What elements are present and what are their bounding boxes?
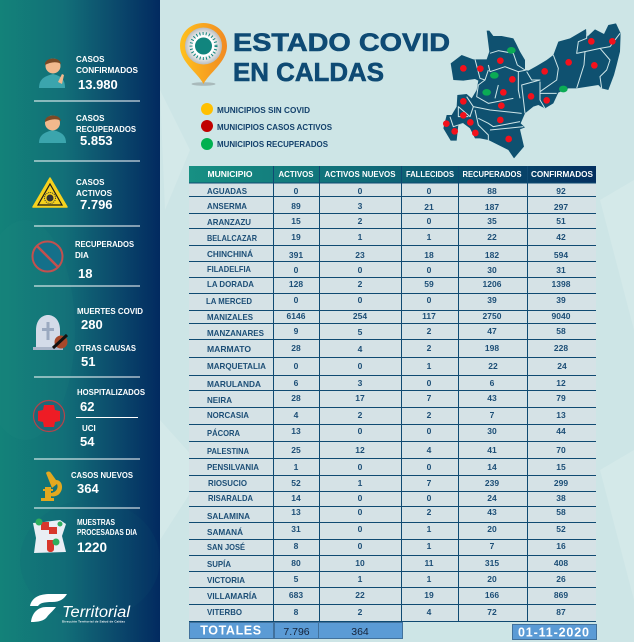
stat: hospitalizados y uci [76, 388, 146, 449]
table rows: 13 [291, 507, 301, 517]
table rows: 38 [556, 493, 566, 503]
table [189, 166, 596, 622]
table rows: RIOSUCIO [208, 478, 247, 488]
table rows: 4 [294, 410, 299, 420]
table rows: 59 [424, 279, 434, 289]
table rows: 24 [487, 493, 497, 503]
table rows: 28 [291, 393, 301, 403]
table rows: 22 [487, 232, 497, 242]
table rows: MANZANARES [207, 328, 264, 338]
logo: Territorial: Dirección Territorial de Salud de Caldas [62, 620, 125, 624]
map of Caldas [440, 20, 623, 160]
stat: hospitalizados y uci: 54 [80, 434, 95, 449]
stat: hospitalizados y uci: HOSPITALIZADOS [77, 388, 146, 397]
stat: recuperados dia: RECUPERADOS [75, 240, 135, 249]
table rows: 52 [556, 524, 566, 534]
table rows: 0 [427, 186, 432, 196]
table rows: 117 [422, 311, 436, 321]
totals row [190, 622, 402, 638]
table rows: 0 [358, 361, 363, 371]
table rows: 7 [490, 541, 495, 551]
table rows: MARMATO [207, 344, 251, 354]
table rows: 19 [291, 232, 301, 242]
table rows: 0 [294, 186, 299, 196]
table rows: 79 [556, 393, 566, 403]
table rows: 1 [358, 478, 363, 488]
table rows: 166 [485, 590, 499, 600]
icon: prohibition sign [32, 242, 62, 272]
table header: ACTIVOS NUEVOS [324, 170, 396, 179]
table rows: 6 [294, 378, 299, 388]
table rows: NORCASIA [207, 410, 249, 420]
table rows: 72 [487, 607, 497, 617]
logo: Territorial [30, 594, 131, 624]
table rows: 14 [487, 462, 497, 472]
table rows: 17 [355, 393, 365, 403]
table rows: 2 [427, 507, 432, 517]
stat: muertes covid y otras causas: OTRAS CAUSAS [75, 344, 137, 353]
table rows: 1398 [552, 279, 571, 289]
table rows: 1 [358, 232, 363, 242]
table header: FALLECIDOS [406, 170, 455, 179]
table rows: 3 [358, 201, 363, 211]
table rows: 187 [485, 202, 499, 212]
table rows: 89 [291, 201, 301, 211]
logo: Territorial: Territorial [62, 604, 131, 621]
table rows: PÁCORA [207, 428, 240, 438]
table header [189, 166, 596, 183]
table rows: 20 [487, 574, 497, 584]
table rows: 58 [556, 326, 566, 336]
table rows: 70 [556, 445, 566, 455]
faded background leaves [160, 90, 634, 600]
table rows: 0 [427, 295, 432, 305]
table rows: 683 [289, 590, 303, 600]
table rows: MARULANDA [207, 379, 261, 389]
stat: casos recuperados: CASOS [76, 114, 105, 123]
table rows: SALAMINA [207, 511, 250, 521]
table rows: 1 [427, 541, 432, 551]
table rows: 30 [487, 426, 497, 436]
table body background [189, 183, 596, 621]
legend: MUNICIPIOS RECUPERADOS [217, 139, 328, 149]
table header: CONFIRMADOS [531, 170, 594, 179]
table rows: 0 [427, 462, 432, 472]
stat: casos activos: ACTIVOS [76, 189, 113, 198]
table rows: 0 [358, 295, 363, 305]
table rows: VITERBO [207, 607, 242, 617]
table rows: FILADELFIA [207, 264, 251, 274]
table rows: 408 [554, 558, 568, 568]
table rows: 13 [291, 426, 301, 436]
table rows: 31 [556, 265, 566, 275]
table rows: 0 [358, 265, 363, 275]
table rows: 15 [291, 216, 301, 226]
table rows: 7 [427, 478, 432, 488]
stat: casos confirmados [76, 55, 139, 92]
table rows: 41 [487, 445, 497, 455]
table rows: 88 [487, 186, 497, 196]
legend [201, 103, 332, 150]
table rows: 28 [291, 343, 301, 353]
date box: 01-11-2020 [518, 626, 589, 640]
table rows: 3 [358, 378, 363, 388]
table rows: CHINCHINÁ [207, 249, 253, 259]
table rows: ANSERMA [207, 201, 247, 211]
stat: muestras procesadas dia [77, 518, 137, 555]
table rows: 0 [427, 378, 432, 388]
table rows: 92 [556, 186, 566, 196]
table rows: 7 [427, 393, 432, 403]
stat: casos confirmados: CASOS [76, 55, 105, 64]
table rows: 0 [358, 493, 363, 503]
table rows: 42 [556, 232, 566, 242]
table rows: 12 [355, 445, 365, 455]
table rows: 23 [355, 250, 365, 260]
table rows: 297 [554, 202, 568, 212]
table rows: 1 [427, 232, 432, 242]
table rows: 0 [358, 541, 363, 551]
stat: casos confirmados: CONFIRMADOS [76, 66, 139, 75]
table rows: 0 [358, 524, 363, 534]
table rows: BELALCAZAR [207, 233, 257, 243]
table rows: 9 [294, 326, 299, 336]
stat: hospitalizados y uci: 62 [80, 399, 94, 414]
stat: casos activos [76, 178, 113, 212]
stat: hospitalizados y uci: UCI [82, 424, 96, 433]
table rows: 0 [294, 295, 299, 305]
table rows: 2 [427, 343, 432, 353]
stat: muertes covid y otras causas: 51 [81, 354, 95, 369]
table rows: AGUADAS [207, 186, 247, 196]
table rows: 1 [427, 574, 432, 584]
table rows: 22 [488, 361, 498, 371]
icon: test samples [33, 518, 66, 553]
table rows: 18 [424, 250, 434, 260]
table rows: 24 [557, 361, 567, 371]
table rows: 80 [291, 558, 301, 568]
table rows: 0 [427, 216, 432, 226]
table rows: 254 [353, 311, 367, 321]
stat: recuperados dia: 18 [78, 266, 92, 281]
table rows: 16 [556, 541, 566, 551]
table rows: 7 [490, 410, 495, 420]
table rows: VILLAMARÍA [207, 591, 257, 601]
title: EN CALDAS [233, 57, 384, 87]
table rows: 47 [487, 326, 497, 336]
title: ESTADO COVID [233, 29, 450, 57]
table rows: 39 [556, 295, 566, 305]
table rows: 58 [556, 507, 566, 517]
table rows: 6 [490, 378, 495, 388]
table rows: 2 [358, 279, 363, 289]
stat: muertes covid y otras causas: MUERTES COVID [77, 307, 143, 316]
table rows: 8 [294, 541, 299, 551]
table rows: 1206 [483, 279, 502, 289]
stat: casos recuperados: 5.853 [80, 133, 113, 148]
icon: microscope [41, 472, 62, 501]
table rows: 39 [487, 295, 497, 305]
table rows [206, 186, 571, 617]
table rows: MANIZALES [207, 312, 253, 322]
table rows: ARANZAZU [207, 217, 251, 227]
stat: casos confirmados: 13.980 [78, 77, 118, 92]
title [233, 29, 450, 87]
table rows: RISARALDA [208, 493, 253, 503]
table rows: 52 [291, 478, 301, 488]
table rows: 2 [427, 410, 432, 420]
table rows: 22 [355, 590, 365, 600]
table rows: 0 [294, 361, 299, 371]
table rows: 1 [427, 361, 432, 371]
table rows: 315 [485, 558, 499, 568]
icon: biohazard warning triangle [33, 178, 67, 207]
table rows: 128 [289, 279, 303, 289]
table rows: 14 [291, 493, 301, 503]
table rows: 4 [427, 607, 432, 617]
table rows: 8 [294, 607, 299, 617]
table rows: SAN JOSÉ [207, 542, 245, 552]
icon: medical cross [34, 400, 64, 432]
stat: muestras procesadas dia: 1220 [77, 540, 107, 555]
table rows: 2 [358, 607, 363, 617]
table rows: 21 [424, 202, 434, 212]
table rows: 12 [556, 378, 566, 388]
table rows: 30 [487, 265, 497, 275]
table rows: 2 [427, 326, 432, 336]
table rows: PALESTINA [207, 446, 249, 456]
totals row: 7.796 [283, 626, 310, 638]
table rows: 198 [485, 343, 499, 353]
stat: recuperados dia: DIA [75, 251, 89, 260]
stat: casos activos: CASOS [76, 178, 105, 187]
table rows: 19 [424, 590, 434, 600]
table rows: SUPÍA [207, 559, 231, 569]
table rows: 13 [556, 410, 566, 420]
sidebar panel [0, 0, 160, 642]
table rows: 182 [485, 250, 499, 260]
totals row: TOTALES [200, 624, 262, 638]
stat: casos nuevos [71, 471, 134, 496]
stat: muertes covid y otras causas: 280 [81, 317, 103, 332]
stat: recuperados dia [75, 240, 135, 281]
stat: casos activos: 7.796 [80, 197, 113, 212]
table rows: 9040 [552, 311, 571, 321]
table rows: 0 [427, 426, 432, 436]
table rows: 43 [487, 507, 497, 517]
table rows: 20 [487, 524, 497, 534]
table rows: 51 [556, 216, 566, 226]
table rows: 10 [355, 558, 365, 568]
table rows: 1 [427, 524, 432, 534]
stat: muestras procesadas dia: PROCESADAS DIA [77, 528, 137, 537]
table rows: 25 [291, 445, 301, 455]
table rows: 869 [554, 590, 568, 600]
table rows: 44 [556, 426, 566, 436]
table rows: NEIRA [207, 395, 232, 405]
table rows: 4 [427, 445, 432, 455]
table rows: 11 [424, 558, 434, 568]
table rows: 31 [291, 524, 301, 534]
table rows: 1 [294, 462, 299, 472]
legend: MUNICIPIOS CASOS ACTIVOS [217, 122, 332, 132]
table rows: LA DORADA [207, 279, 254, 289]
stat: casos nuevos: 364 [77, 481, 99, 496]
table rows: 0 [427, 493, 432, 503]
table rows: 0 [294, 265, 299, 275]
table rows: 26 [556, 574, 566, 584]
table rows: 2 [358, 216, 363, 226]
legend: MUNICIPIOS SIN COVID [217, 105, 310, 115]
table rows: 15 [556, 462, 566, 472]
table rows: 35 [487, 216, 497, 226]
totals row: 364 [351, 626, 369, 638]
stat: casos recuperados: RECUPERADOS [76, 125, 137, 134]
table rows: 4 [358, 344, 363, 354]
table rows: 2 [358, 410, 363, 420]
icon: person recovered [39, 115, 66, 143]
icon: location pin with virus [180, 23, 227, 86]
table rows: VICTORIA [207, 575, 245, 585]
table rows: 2750 [483, 311, 502, 321]
stat: casos nuevos: CASOS NUEVOS [71, 471, 134, 480]
table rows: 228 [554, 343, 568, 353]
table rows: 0 [358, 426, 363, 436]
stat: muestras procesadas dia: MUESTRAS [77, 518, 116, 527]
table rows: SAMANÁ [207, 527, 243, 537]
table header: RECUPERADOS [462, 170, 522, 179]
icon: person confirmed [39, 58, 65, 88]
table rows: 6146 [287, 311, 306, 321]
table rows: MARQUETALIA [207, 361, 266, 371]
table rows: 299 [554, 478, 568, 488]
table rows: 0 [358, 186, 363, 196]
table rows: 5 [294, 574, 299, 584]
icon: tombstone [33, 315, 68, 350]
table rows: PENSILVANIA [207, 462, 259, 472]
table rows: 239 [485, 478, 499, 488]
table rows: 43 [487, 393, 497, 403]
table rows: 391 [289, 250, 303, 260]
table header: MUNICIPIO [208, 170, 252, 179]
stat: muertes covid y otras causas [75, 307, 143, 369]
table rows: LA MERCED [206, 296, 252, 306]
table rows: 0 [358, 507, 363, 517]
stat: casos recuperados [76, 114, 137, 148]
table rows: 87 [556, 607, 566, 617]
table rows: 1 [358, 574, 363, 584]
table header: ACTIVOS [278, 170, 314, 179]
table rows: 0 [427, 265, 432, 275]
table rows: 594 [554, 250, 568, 260]
table rows: 5 [358, 327, 363, 337]
table rows: 0 [358, 462, 363, 472]
